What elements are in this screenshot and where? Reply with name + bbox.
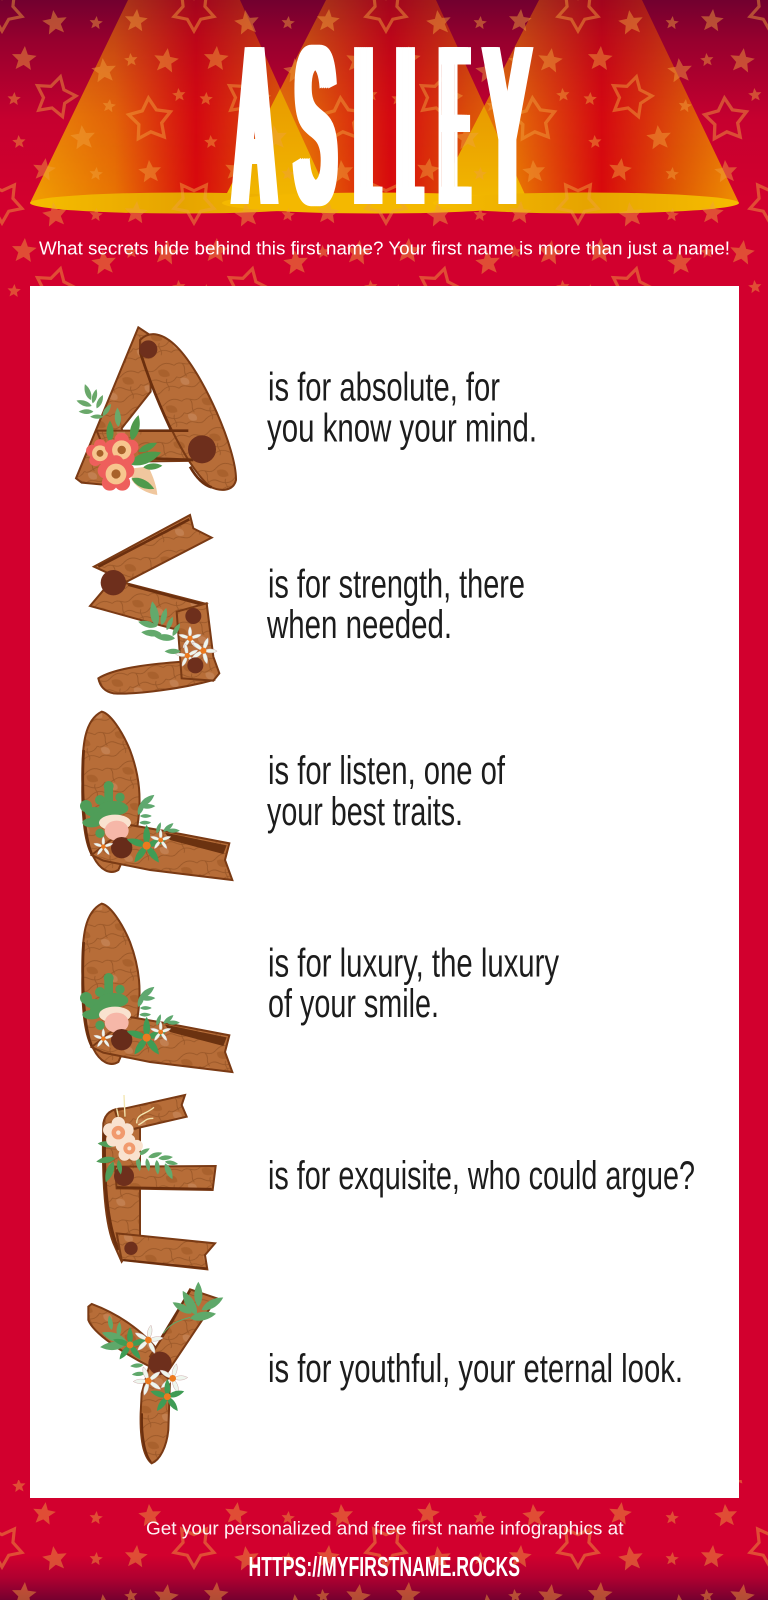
text: second L line [268,942,559,1026]
row: letter L two [80,904,559,1072]
title: ASLEY style name heading: S [295,0,336,253]
text: L line [267,749,506,834]
title: ASLEY style name heading: L [360,0,375,253]
text: second L line: of your smile. [268,982,439,1026]
title: ASLEY style name heading: Y [484,0,531,253]
title: ASLEY style name heading: A [234,0,275,253]
panel: white letters panel [30,286,739,1498]
text: A line [267,366,537,451]
row: letter L one [80,712,506,880]
spotlights: three cones with discs [30,0,739,214]
icon: wooden letter A [76,327,236,495]
text: L line: is for listen, one of [268,749,506,793]
icon: wooden letter Y [88,1282,225,1463]
text: L line: your best traits. [267,790,463,834]
text: S line: when needed. [266,603,452,647]
icon: wooden letter S [90,515,221,694]
row: letter E [96,1095,695,1269]
row: letter A [76,327,537,495]
row: letter Y [88,1282,683,1463]
title: ASLEY style name heading: L [402,0,417,253]
footer url: HTTPS://MYFIRSTNAME.ROCKS [248,1551,520,1582]
title: ASLEY style name heading: E [444,0,464,253]
title: ASLEY style name heading [230,0,534,253]
row: letter S [90,515,525,694]
footer call to action text: Get your personalized and free first name infographics at [146,1518,624,1538]
icon: wooden letter L second [80,904,232,1072]
text: S line [266,562,525,647]
text: second L line: is for luxury, the luxury [268,942,559,986]
icon: wooden letter E [96,1095,216,1269]
icon: wooden letter L [80,712,232,880]
text: A line: is for absolute, for [268,366,500,410]
text: S line: is for strength, there [268,562,525,606]
subtitle: What secrets hide behind this first name? Your first name is more than just a name! [39,238,730,258]
text: A line: you know your mind. [267,407,537,451]
